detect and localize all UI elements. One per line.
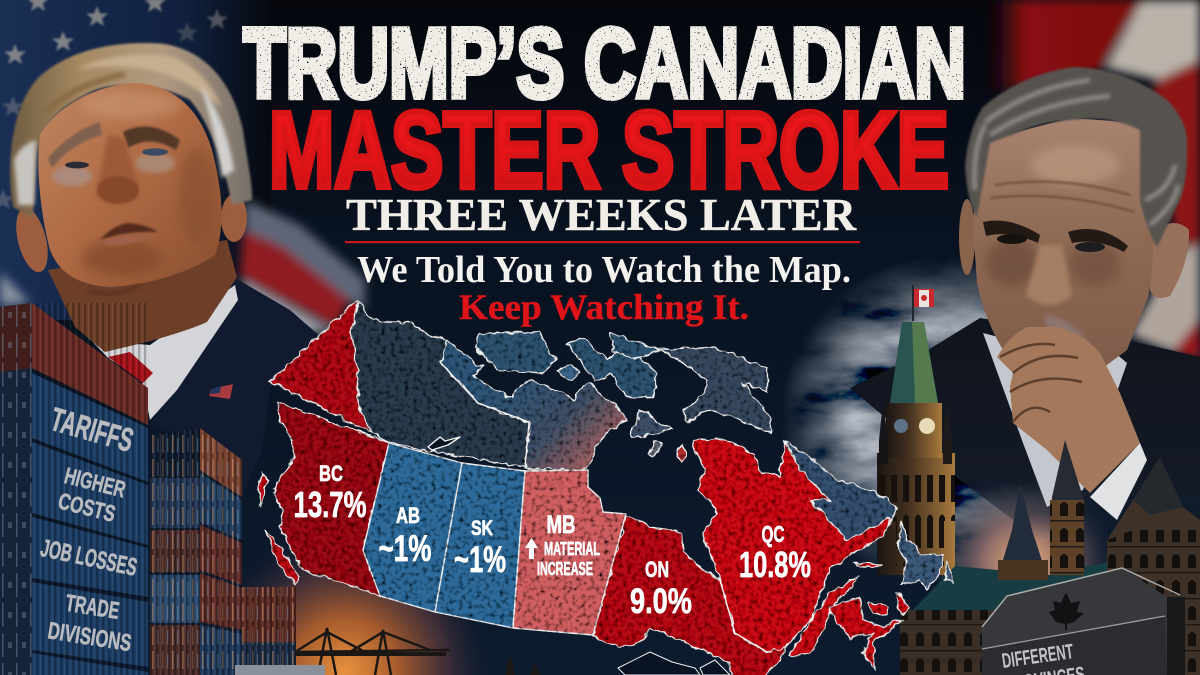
label: SK bbox=[454, 517, 506, 580]
parliament buildings bbox=[850, 67, 1200, 675]
label: QC: QC bbox=[762, 521, 784, 547]
background: US flag bbox=[0, 0, 365, 332]
background: Canadian flag bbox=[985, 0, 1200, 360]
hair highlights bbox=[974, 80, 1178, 225]
region: Ontario bbox=[593, 515, 785, 675]
region: Newfoundland bbox=[898, 520, 943, 590]
central tower bbox=[998, 440, 1085, 580]
region: coastal islands bbox=[257, 473, 299, 583]
container stack: small rear bbox=[242, 587, 296, 675]
region: Alberta bbox=[363, 443, 462, 612]
container stack: middle bbox=[150, 428, 242, 675]
roofs and main block bbox=[900, 562, 1107, 675]
label: AB: AB bbox=[396, 503, 420, 528]
Great Bear Lake bbox=[428, 437, 460, 450]
title line 2: MASTER STROKE bbox=[269, 89, 949, 210]
label: QC bbox=[739, 521, 811, 585]
label: ON: ON bbox=[645, 557, 669, 582]
region: Yukon bbox=[270, 300, 372, 433]
background bbox=[32, 190, 1200, 675]
shirt collar bbox=[75, 285, 238, 420]
label: SK: SK bbox=[471, 517, 493, 540]
hair bbox=[965, 67, 1187, 247]
ears bbox=[10, 194, 247, 275]
Arctic islands bbox=[475, 333, 770, 462]
label: MB bbox=[525, 511, 600, 579]
label: MB: MB bbox=[546, 511, 576, 539]
tie bbox=[108, 352, 153, 383]
icon: maple leaf bbox=[1049, 592, 1084, 630]
tagline red: Keep Watching It. bbox=[459, 287, 749, 327]
label: ON bbox=[630, 557, 692, 621]
icon: up arrow bbox=[525, 538, 538, 559]
portrait: Mark Carney bbox=[850, 67, 1200, 540]
face bbox=[38, 83, 222, 287]
neck bbox=[48, 240, 237, 352]
region: British Columbia bbox=[273, 402, 389, 596]
gravestone bbox=[982, 568, 1185, 675]
label: BC: BC bbox=[319, 461, 343, 486]
label: SK: ~1% bbox=[454, 539, 506, 580]
suit bbox=[150, 278, 322, 500]
label: QC: 10.8% bbox=[739, 544, 811, 585]
label: BC: 13.7% bbox=[294, 484, 366, 525]
container label: Higher Costs: HIGHER bbox=[62, 462, 129, 503]
region: Quebec bbox=[692, 437, 892, 652]
clock faces bbox=[894, 418, 935, 434]
label: AB: ~1% bbox=[378, 528, 432, 569]
label: MB: MATERIAL bbox=[544, 539, 600, 559]
ears bbox=[959, 199, 1189, 298]
hair bbox=[10, 43, 252, 218]
title bbox=[242, 8, 966, 327]
container label: Trade Divisions: TRADE bbox=[64, 590, 121, 625]
container label: Higher Costs: COSTS bbox=[56, 488, 118, 527]
map labels bbox=[294, 461, 811, 621]
label: ON: 9.0% bbox=[630, 582, 692, 621]
container label: Job Losses: JOB LOSSES bbox=[38, 534, 140, 582]
portrait: Donald Trump bbox=[10, 43, 322, 500]
container label: Tariffs: TARIFFS bbox=[47, 400, 138, 459]
shipping containers bbox=[0, 303, 296, 675]
label: AB bbox=[378, 503, 432, 569]
gravestone text: DIFFERENT bbox=[1000, 640, 1075, 673]
hair highlights bbox=[14, 55, 234, 205]
label: MB: INCREASE bbox=[537, 559, 593, 579]
region: Maritimes bbox=[788, 562, 910, 670]
face features bbox=[48, 91, 215, 294]
lapel flag pin bbox=[209, 384, 233, 399]
red divider bbox=[345, 241, 860, 243]
suit bbox=[850, 318, 1200, 540]
cranes and port skyline bbox=[235, 628, 540, 675]
container stack: front bbox=[0, 303, 148, 675]
region: Northwest Territories bbox=[352, 300, 529, 468]
tagline: We Told You to Watch the Map. bbox=[357, 249, 851, 291]
label: BC bbox=[294, 461, 366, 525]
peace tower bbox=[877, 285, 955, 575]
right wing bbox=[1107, 457, 1200, 675]
region: Nunavut bbox=[440, 340, 627, 470]
face features bbox=[983, 145, 1135, 345]
region: Manitoba bbox=[513, 470, 626, 635]
flagpole and Canadian flag bbox=[912, 285, 934, 321]
shirt bbox=[983, 333, 1127, 507]
region: Saskatchewan bbox=[435, 463, 525, 628]
sunset glow bbox=[930, 470, 1120, 580]
Great Lakes bbox=[618, 652, 730, 675]
hand bbox=[997, 327, 1147, 520]
subtitle: THREE WEEKS LATER bbox=[346, 190, 857, 240]
region: Labrador bbox=[785, 440, 897, 540]
map of Canada bbox=[257, 300, 953, 675]
coastal regions with rough outlines bbox=[257, 300, 953, 675]
face bbox=[973, 118, 1153, 385]
provincial borders bbox=[440, 362, 767, 652]
container label: Trade Divisions: DIVISIONS bbox=[46, 617, 133, 657]
